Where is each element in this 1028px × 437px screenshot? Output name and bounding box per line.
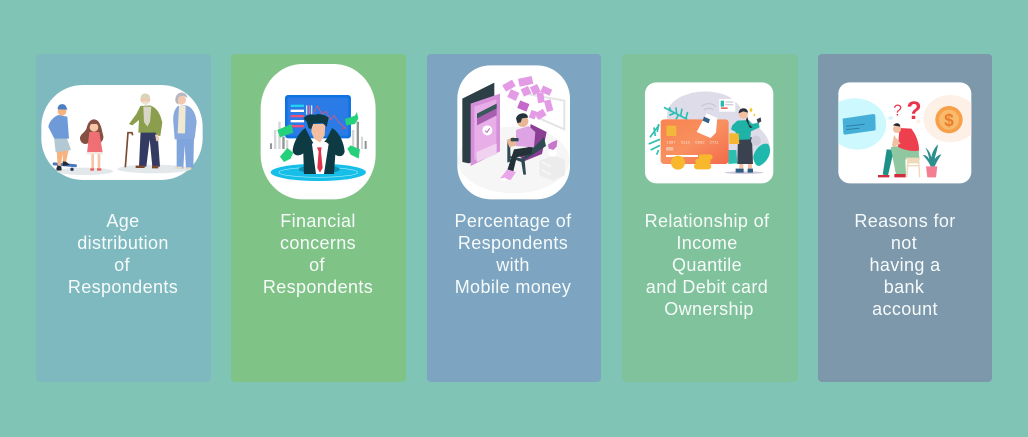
image card: people of different ages	[41, 85, 203, 180]
receipt	[697, 113, 717, 138]
credit card: 2711	[710, 139, 720, 144]
figure: elderly man with cane	[125, 94, 162, 168]
lilac blob	[667, 92, 770, 160]
panel: age distribution	[36, 54, 211, 382]
potted plant	[923, 144, 941, 177]
label: income and debit card	[645, 211, 770, 319]
label: income and debit card: Ownership	[664, 299, 754, 319]
label: mobile money: Mobile money	[455, 277, 571, 297]
label: income and debit card: Relationship of	[645, 211, 770, 231]
label: age distribution: of	[114, 255, 131, 275]
label: financial concerns: Financial	[280, 211, 356, 231]
water pool	[271, 164, 366, 181]
label: income and debit card: and Debit card	[646, 277, 768, 297]
label: mobile money: Respondents	[458, 233, 568, 253]
grey background bars	[270, 122, 367, 149]
label: mobile money: with	[495, 255, 530, 275]
peach circle with coin: $	[944, 110, 954, 130]
panel: income and debit card	[622, 54, 798, 382]
label: no bank account	[854, 211, 956, 319]
label: financial concerns	[263, 211, 373, 297]
panel: no bank account	[818, 54, 992, 382]
question marks: ?	[893, 103, 902, 120]
thought bubbles	[888, 116, 920, 123]
light blue circle with card	[838, 98, 886, 150]
label: age distribution: Age	[106, 211, 140, 231]
credit card: 0582	[695, 139, 705, 144]
image card: stressed businessman	[261, 64, 376, 199]
credit card: 9113	[681, 139, 691, 144]
credit card: 1387	[666, 139, 676, 144]
label: age distribution: distribution	[77, 233, 169, 253]
figure: boy on skateboard	[48, 104, 77, 171]
person	[500, 113, 535, 181]
flying banknotes	[277, 112, 360, 162]
phone	[462, 83, 500, 166]
side table	[539, 155, 565, 181]
stool	[906, 158, 920, 177]
label: income and debit card: Income	[676, 233, 738, 253]
message bubble	[719, 99, 735, 112]
label: no bank account: not	[891, 233, 917, 253]
credit card	[661, 119, 729, 164]
figure: elderly woman	[173, 92, 197, 170]
gold coins	[671, 154, 713, 170]
label: financial concerns: concerns	[280, 233, 356, 253]
leaves	[649, 107, 770, 166]
question marks	[893, 98, 922, 125]
floor	[458, 127, 570, 193]
question marks: ?	[906, 98, 922, 125]
image card: debit card and shopper	[645, 82, 773, 183]
image card: person using phone with flying money	[457, 65, 570, 199]
label: income and debit card: Quantile	[672, 255, 742, 275]
image card: thinking man	[838, 82, 971, 183]
label: age distribution: Respondents	[68, 277, 178, 297]
label: mobile money	[454, 211, 572, 297]
trading screen	[285, 95, 351, 138]
potted plant	[548, 140, 557, 157]
ground shadows	[57, 165, 191, 175]
panel: mobile money	[427, 54, 601, 382]
label: no bank account: account	[872, 299, 938, 319]
armchair	[507, 124, 547, 175]
flying banknotes	[502, 76, 553, 120]
label: financial concerns: Respondents	[263, 277, 373, 297]
label: no bank account: having a	[869, 255, 941, 275]
label: no bank account: Reasons for	[854, 211, 956, 231]
window frame	[527, 94, 564, 129]
panel: financial concerns	[231, 54, 406, 382]
wifi symbol	[701, 104, 716, 110]
businessman	[293, 114, 345, 174]
label: no bank account: bank	[884, 277, 925, 297]
shopper woman	[725, 107, 763, 174]
label: mobile money: Percentage of	[454, 211, 572, 231]
label: age distribution	[68, 211, 178, 297]
figure: girl	[80, 119, 103, 171]
label: financial concerns: of	[309, 255, 326, 275]
sitting man	[878, 123, 919, 177]
